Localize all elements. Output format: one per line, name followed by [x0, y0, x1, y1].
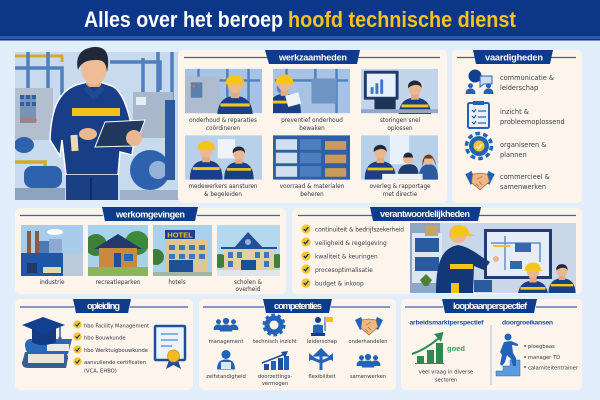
text: inzicht: probleemoplossend [500, 118, 565, 126]
text: commercieel [500, 173, 550, 191]
tile: recreatieparken: recreatieparken [96, 280, 141, 286]
icon: doorzettingsvermogen: doorzettings- [258, 374, 292, 380]
tile: overleg & rapportage: overleg & rapportage [369, 184, 431, 190]
title: Alles over het beroep [84, 7, 283, 32]
text: communicatie [500, 74, 554, 92]
panel: werkomgevingen [15, 207, 286, 294]
caption: veel vraag: sectoren [435, 378, 457, 384]
icon: doorzettingsvermogen: vermogen [262, 381, 288, 387]
subheading: arbeidsmarktperspectief: arbeidsmarktperspectief [410, 320, 484, 326]
tile: scholen & overheid: scholen & [234, 280, 263, 286]
tile: onderhoud & reparaties: onderhoud & reparaties [189, 118, 257, 124]
panel: vaardigheden: vaardigheden [485, 52, 543, 62]
icon: onderhandelen [348, 317, 388, 345]
panel: vaardigheden [452, 50, 582, 203]
icon: clipboard [468, 101, 489, 128]
degrees list: hbo Bouwkunde [84, 336, 126, 342]
label: goed: goed [447, 344, 465, 353]
icon: leiderschap [307, 317, 338, 345]
tile: overleg & rapportage: met directie [383, 192, 418, 198]
text: communicatie: leiderschap [500, 84, 538, 92]
hero illustration: technician with tablet [14, 47, 180, 200]
tile: overleg & rapportage [361, 135, 438, 198]
degrees list: (VCA, EHBO) [84, 368, 117, 374]
tile: preventief onderhoud: preventief onderhoud [281, 118, 343, 124]
tile: medewerkers aansturen [185, 135, 262, 198]
checklist: budget & inkoop [315, 282, 364, 288]
tile: voorraad & materialen [273, 135, 350, 198]
tile: onderhoud & reparaties: coördineren [206, 126, 240, 132]
checklist: veiligheid & regelgeving [315, 241, 387, 247]
caption: veel vraag [419, 370, 473, 384]
icon: leiderschap: leiderschap [307, 339, 338, 345]
text: commercieel: commercieel & [500, 173, 550, 181]
text: inzicht: inzicht & [500, 108, 529, 116]
illustration: technician at process screen [410, 223, 576, 293]
panel: opleiding: opleiding [87, 301, 120, 311]
tile: medewerkers aansturen: & begeleiden [204, 192, 242, 198]
tile: industrie: industrie [39, 280, 65, 286]
career options list [524, 344, 579, 372]
panel: opleiding [15, 299, 193, 390]
checklist: procesoptimalisatie [315, 268, 373, 274]
icon: doorzettingsvermogen [258, 351, 292, 387]
tile: scholen & overheid: overheid [236, 287, 261, 293]
checklist: continuïteit & bedrijfszekerheid [315, 228, 404, 234]
tile: scholen & overheid [213, 225, 284, 293]
text: communicatie: communicatie & [500, 74, 554, 82]
tile: storingen oplossen [361, 69, 438, 132]
text: commercieel: samenwerken [500, 183, 546, 191]
tile: hotels: HOTEL [167, 230, 193, 240]
icon: management: management [209, 339, 243, 345]
icon: communication [466, 70, 493, 94]
icon: certificate [155, 326, 185, 369]
chart: growth arrow [412, 332, 444, 364]
caption: veel vraag: veel vraag in diverse [419, 370, 473, 376]
tile: preventief onderhoud: bewaken [299, 126, 325, 132]
icon: samenwerken: samenwerken [350, 374, 386, 380]
text: inzicht [500, 108, 565, 126]
checklist [301, 224, 404, 288]
text: organiseren: plannen [500, 151, 527, 159]
icon: zelfstandigheid: zelfstandigheid [206, 374, 246, 380]
tile: storingen oplossen: oplossen [387, 126, 413, 132]
tile: hotels [148, 225, 212, 286]
tile: medewerkers aansturen: medewerkers aansturen [188, 184, 258, 190]
icon: management [209, 318, 243, 345]
subheading: doorgroeikansen: doorgroeikansen [502, 320, 553, 326]
icon: gear [466, 134, 492, 158]
tile: hotels: hotels [168, 280, 186, 286]
text: organiseren [500, 141, 546, 159]
panel: competenties [199, 299, 396, 390]
panel: werkzaamheden: werkzaamheden [278, 52, 347, 62]
panel: competenties: competenties [274, 301, 322, 311]
text: organiseren: organiseren & [500, 141, 546, 149]
icon: technisch inzicht: technisch inzicht [253, 339, 297, 345]
icon: flexibiliteit [308, 350, 336, 380]
icon: zelfstandigheid [206, 350, 246, 380]
checklist: kwaliteit & keuringen [315, 254, 378, 260]
panel: werkomgevingen: werkomgevingen [115, 210, 185, 220]
icon: handshake [465, 171, 495, 190]
title: hoofd technische dienst [288, 7, 517, 32]
icon: technisch inzicht [253, 315, 297, 345]
icon: onderhandelen: onderhandelen [348, 339, 388, 345]
panel: loopbaanperspectief [401, 299, 582, 390]
jacket [50, 80, 134, 175]
panel: verantwoordelijkheden [292, 207, 582, 299]
degrees list: aanvullende certificaten [84, 360, 146, 366]
tile: recreatieparken [85, 225, 149, 286]
icon: flexibiliteit: flexibiliteit [308, 374, 336, 380]
degrees list [73, 320, 149, 374]
header band [0, 0, 600, 40]
tile: industrie [21, 225, 83, 286]
icon: books and graduation cap [22, 317, 72, 368]
career options list: calamiteitentrainer [528, 366, 579, 372]
degrees list: hbo Werktuigbouwkunde [84, 348, 148, 354]
icon: person climbing stairs [496, 334, 520, 376]
icon: samenwerken [350, 354, 386, 380]
divider [490, 325, 492, 385]
degrees list: hbo Facility Management [84, 324, 149, 330]
title [84, 7, 517, 32]
tile: storingen oplossen: storingen snel [380, 118, 421, 124]
tile: voorraad & materialen: beheren [300, 192, 324, 198]
panel: werkzaamheden [178, 50, 447, 203]
career options list: manager TD [528, 355, 560, 361]
career options list: ploegbaas [528, 344, 555, 350]
tile: voorraad & materialen: voorraad & materialen [280, 184, 345, 190]
tile: preventief onderhoud [268, 69, 350, 132]
tile: onderhoud & reparaties [185, 69, 262, 132]
panel: loopbaanperspectief: loopbaanperspectief [453, 301, 528, 311]
panel: verantwoordelijkheden: verantwoordelijkheden [380, 209, 470, 219]
